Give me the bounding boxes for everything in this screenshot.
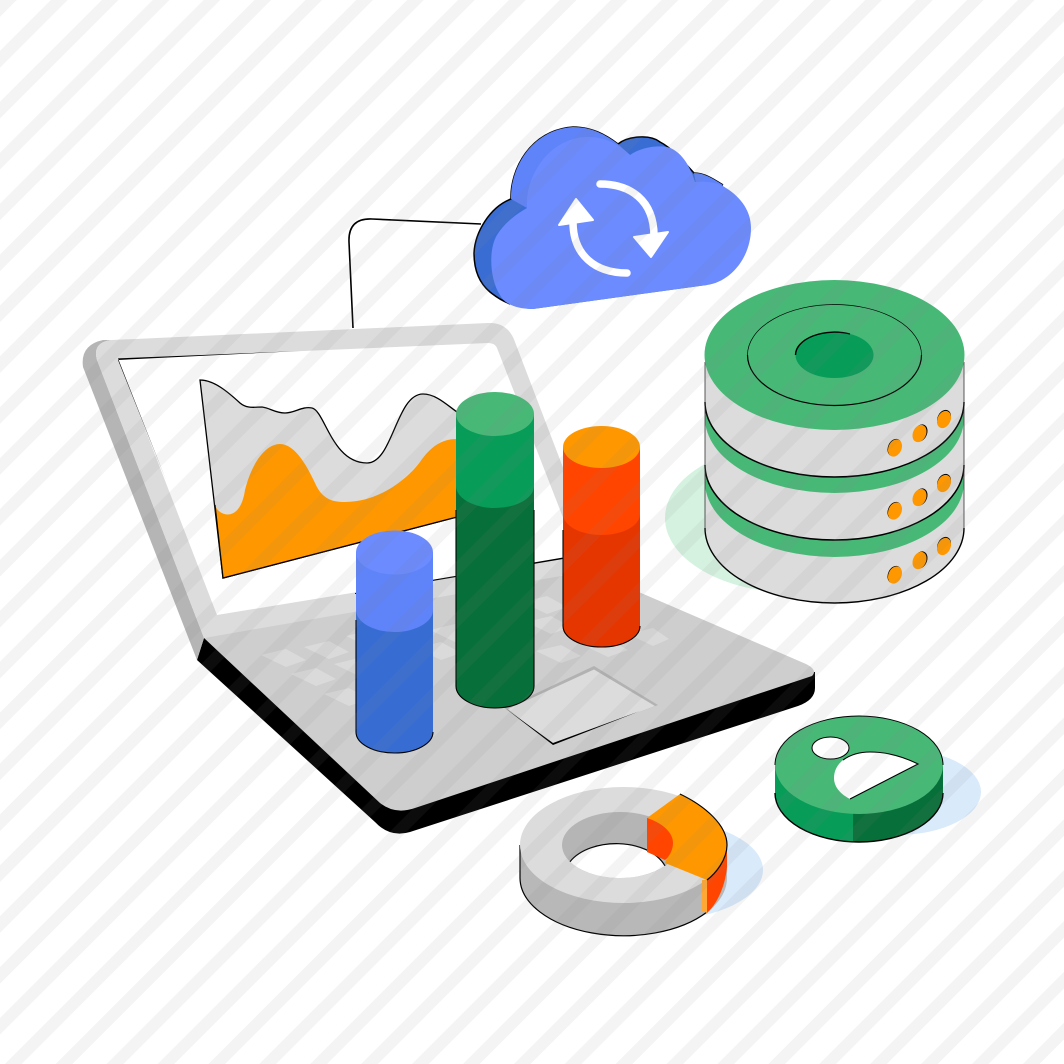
- green cylinder: [456, 392, 534, 708]
- laptop base side: [197, 638, 815, 834]
- user coin shadow: [813, 749, 981, 835]
- donut side wall: [520, 845, 727, 936]
- coin top face: [775, 716, 943, 814]
- coin left side: [775, 765, 853, 842]
- server disk 2: [705, 418, 964, 540]
- orange cylinder: [563, 426, 640, 647]
- server green band 2: [705, 407, 964, 557]
- laptop: [83, 323, 815, 834]
- user body: [834, 752, 918, 799]
- server disk 3: [705, 482, 964, 603]
- donut hole back wall: [562, 812, 678, 878]
- connector line from cloud to laptop: [349, 219, 481, 328]
- cloud right lobe side: [694, 173, 723, 190]
- donut segment inner wall: [647, 818, 673, 860]
- donut segment light edge: [702, 880, 707, 913]
- laptop base top surface: [204, 571, 814, 811]
- coin right side: [853, 765, 943, 842]
- touchpad: [505, 666, 658, 745]
- server green band 1: [705, 343, 964, 493]
- grey area series: [200, 380, 457, 578]
- user badge coin: [775, 716, 943, 842]
- server stack: [704, 280, 964, 603]
- cloud front face: [491, 137, 751, 309]
- server disk 1: [705, 355, 964, 477]
- server shadow: [665, 443, 925, 593]
- sync arrows icon: [559, 184, 668, 273]
- laptop screen display: [118, 343, 578, 615]
- server indicator lights: [885, 408, 954, 586]
- orange area series: [215, 439, 457, 578]
- donut chart: [520, 787, 727, 936]
- coin outline: [775, 793, 943, 842]
- blue cylinder: [356, 530, 433, 753]
- laptop screen bezel: [96, 323, 606, 638]
- server side edges: [705, 362, 964, 528]
- server top face: [704, 280, 964, 430]
- donut orange segment side: [707, 843, 727, 913]
- cloud back silhouette: [474, 127, 723, 309]
- donut orange segment top: [647, 794, 727, 880]
- keyboard keys: [261, 596, 669, 706]
- area chart on screen: [200, 380, 457, 578]
- donut hole opening: [570, 844, 665, 878]
- laptop screen side edge: [83, 340, 204, 660]
- cloud upper lobe side: [511, 127, 630, 208]
- donut shadow: [557, 820, 763, 920]
- user head: [812, 737, 849, 759]
- cloud with sync arrows: [474, 127, 751, 309]
- donut top face: [520, 787, 727, 903]
